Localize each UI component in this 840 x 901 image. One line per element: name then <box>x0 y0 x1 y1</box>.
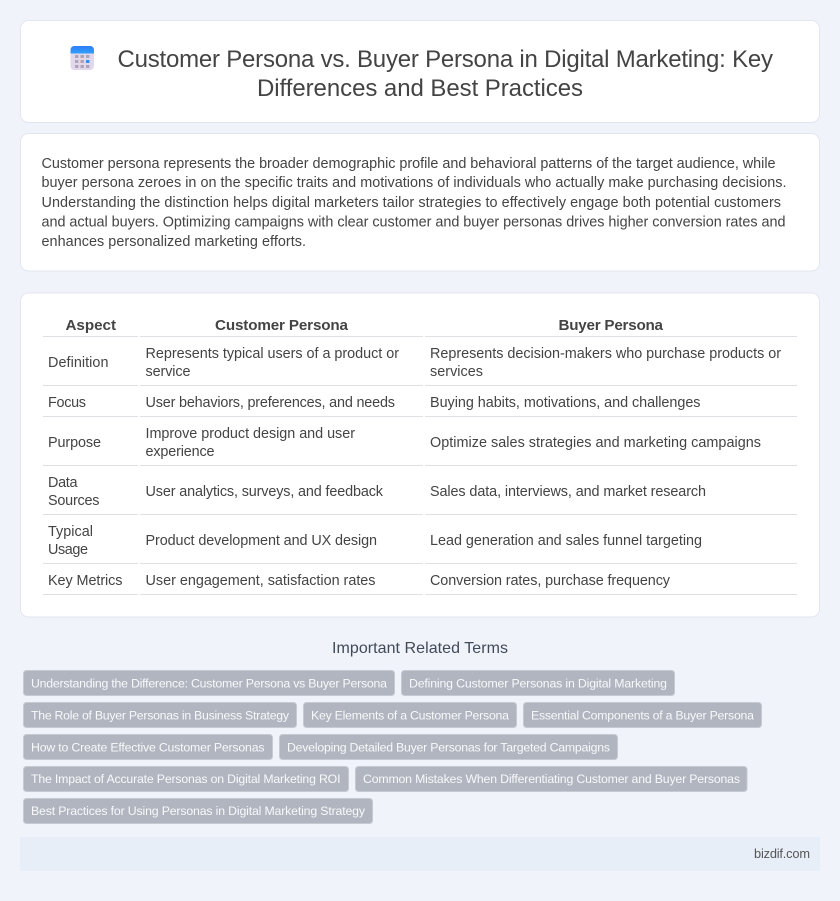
row: typical usage: Usage <box>48 542 88 558</box>
row: data sources: User analytics, surveys, and feedback <box>146 484 384 500</box>
row: definition: service <box>146 364 190 380</box>
footer bar <box>20 837 820 871</box>
row: key metrics: Conversion rates, purchase frequency <box>430 573 671 589</box>
row: definition: services <box>430 364 483 380</box>
panel: comparison table <box>20 293 820 617</box>
row: typical usage <box>48 524 702 558</box>
title: Differences and Best Practices <box>257 75 583 102</box>
heading: important related terms: Important Related Terms <box>332 640 508 657</box>
related terms tags: Developing Detailed Buyer Personas for Targeted Campaigns <box>287 740 610 754</box>
row: definition <box>48 346 781 380</box>
title <box>118 46 773 102</box>
row: definition: Represents decision-makers who purchase products or <box>430 346 781 362</box>
row: key metrics <box>48 573 671 589</box>
title: Customer Persona vs. Buyer Persona in Digital Marketing: Key <box>118 46 773 73</box>
table header row <box>66 317 664 334</box>
row: focus <box>48 395 700 411</box>
related terms tags: Best Practices for Using Personas in Digital Marketing Strategy <box>31 804 366 818</box>
row: purpose <box>48 426 761 460</box>
row: purpose: Optimize sales strategies and marketing campaigns <box>430 435 761 451</box>
row: focus: Focus <box>48 395 86 411</box>
table header row: Aspect <box>66 317 116 334</box>
row: data sources: Data <box>48 475 78 491</box>
row: typical usage: Product development and UX design <box>146 533 377 549</box>
row: typical usage: Typical <box>48 524 93 540</box>
row: key metrics: User engagement, satisfaction rates <box>146 573 376 589</box>
summary paragraph: enhances personalized marketing efforts. <box>42 234 306 250</box>
related terms tags: Key Elements of a Customer Persona <box>311 708 509 722</box>
related terms tags: Essential Components of a Buyer Persona <box>531 708 754 722</box>
footer site name: bizdif.com <box>754 846 810 861</box>
icon: calendar <box>70 46 94 70</box>
related terms tags: Understanding the Difference: Customer Persona vs Buyer Persona <box>31 676 387 690</box>
row: typical usage: Lead generation and sales funnel targeting <box>430 533 702 549</box>
related terms tags: The Impact of Accurate Personas on Digital Marketing ROI <box>31 772 340 786</box>
related terms tags: Defining Customer Personas in Digital Marketing <box>409 676 667 690</box>
row: focus: Buying habits, motivations, and challenges <box>430 395 700 411</box>
related terms tags: How to Create Effective Customer Personas <box>31 740 264 754</box>
row: purpose: Improve product design and user <box>146 426 355 442</box>
row: definition: Definition <box>48 355 108 371</box>
panel: summary <box>20 134 820 271</box>
summary paragraph: Customer persona represents the broader demographic profile and behavioral patterns of the target audience, while <box>42 156 776 172</box>
row: focus: User behaviors, preferences, and needs <box>146 395 395 411</box>
table header row: Buyer Persona <box>558 317 664 334</box>
row: purpose: experience <box>146 444 214 460</box>
related terms tags: The Role of Buyer Personas in Business Strategy <box>31 708 290 722</box>
row: key metrics: Key Metrics <box>48 573 122 589</box>
row: purpose: Purpose <box>48 435 101 451</box>
row: definition: Represents typical users of a product or <box>146 346 399 362</box>
summary paragraph: buyer persona zeroes in on the specific traits and motivations of individuals who actually make purchasing decisions. <box>42 175 786 191</box>
summary paragraph: and actual buyers. Optimizing campaigns with clear customer and buyer personas drives higher conversion rates and <box>42 214 786 230</box>
row: data sources: Sales data, interviews, and market research <box>430 484 706 500</box>
summary paragraph <box>42 156 786 250</box>
related terms tags <box>24 670 762 824</box>
row: data sources <box>48 475 706 509</box>
row: data sources: Sources <box>48 493 100 509</box>
panel: title card <box>20 20 820 122</box>
summary paragraph: Understanding the distinction helps digital marketers tailor strategies to effectively engage both potential customers <box>42 195 781 211</box>
related terms tags: Common Mistakes When Differentiating Customer and Buyer Personas <box>363 772 740 786</box>
table header row: Customer Persona <box>215 317 349 334</box>
